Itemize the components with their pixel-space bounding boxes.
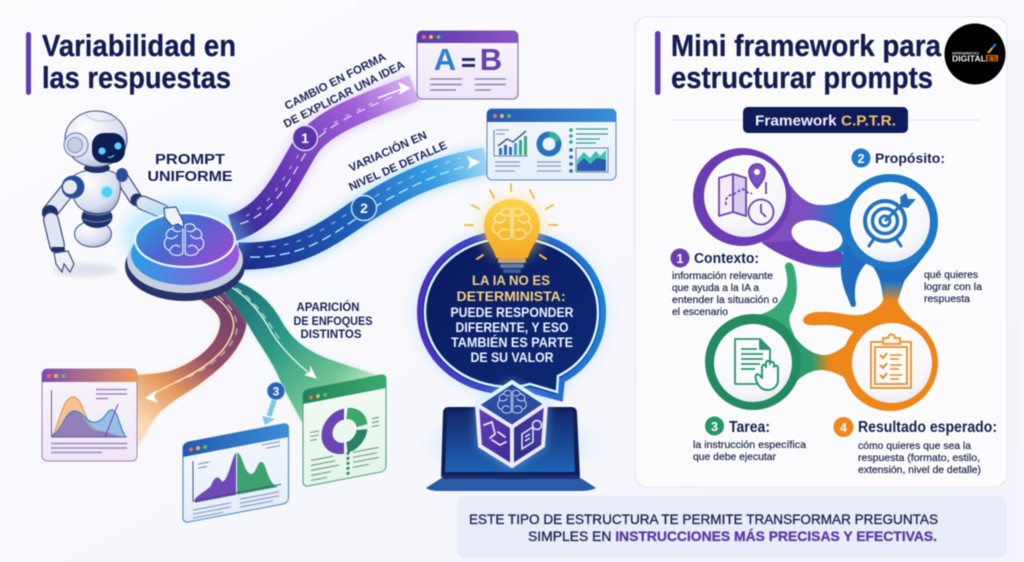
item: proposito xyxy=(852,148,982,305)
ribbon: purple path to A=B card xyxy=(232,82,414,228)
banner: closing message xyxy=(457,496,1007,558)
item: contexto: entender la situación o xyxy=(672,294,778,306)
donut chart xyxy=(540,134,558,154)
arrow: green xyxy=(304,365,317,379)
item: contexto: el escenario xyxy=(672,306,728,318)
badge 3 with arrow xyxy=(262,382,285,425)
robot torso xyxy=(71,169,120,214)
framework pill xyxy=(671,107,980,133)
label: prompt uniforme xyxy=(148,151,232,185)
item: tarea: que debe ejecutar xyxy=(693,451,776,463)
item: resultado esperado: Resultado esperado: xyxy=(858,419,997,436)
area chart xyxy=(576,148,608,172)
heading: mini framework: Mini framework para xyxy=(671,28,942,63)
connector: blue to orange xyxy=(882,282,904,303)
laptop xyxy=(426,407,596,491)
label: aparicion de enfoques distintos: DISTINTOS xyxy=(300,329,362,341)
icon: map, pin and clock xyxy=(719,164,774,224)
card: green tilted donut xyxy=(303,374,386,487)
ribbon: orange path to chart card xyxy=(137,292,247,447)
area chart: curves xyxy=(52,390,126,437)
logo: herramientas digitales: ES xyxy=(987,56,997,63)
node: contexto xyxy=(693,148,791,246)
badge 2: 2 xyxy=(360,200,368,216)
item: tarea xyxy=(693,416,806,463)
label: cambio en forma: CAMBIO EN FORMA xyxy=(283,51,388,113)
ribbon: green path to chart cards xyxy=(220,280,378,424)
icon: document with hand xyxy=(735,339,778,390)
node: proposito xyxy=(842,174,938,270)
icon: clipboard checklist xyxy=(871,334,911,388)
card: A = B: B xyxy=(480,42,502,77)
item: proposito: 2 xyxy=(858,152,865,166)
connector: green to orange xyxy=(782,322,862,396)
item: tarea: 3 xyxy=(711,420,718,434)
heading: variabilidad: Variabilidad en xyxy=(42,28,236,63)
callout: la IA no es determinista: TAMBIÉN ES PARTE xyxy=(451,335,573,350)
panel: framework background xyxy=(635,17,1007,487)
item: resultado esperado: extensión, nivel de detalle) xyxy=(858,464,981,476)
icon: lightbulb with brain xyxy=(465,184,557,273)
logo: herramientas digitales xyxy=(944,24,1006,84)
robot right arm xyxy=(122,178,162,211)
robot xyxy=(42,111,162,277)
heading: mini framework xyxy=(655,28,942,95)
heading: variabilidad xyxy=(26,28,236,95)
label: prompt uniforme: PROMPT xyxy=(155,151,225,168)
label: variacion en nivel de detalle: VARIACIÓN EN xyxy=(347,129,429,175)
label: prompt uniforme: UNIFORME xyxy=(148,168,232,185)
label: aparicion de enfoques distintos: APARICIÓN xyxy=(296,301,360,314)
robot left arm xyxy=(42,192,74,272)
label: aparicion de enfoques distintos: DE ENFOQUES xyxy=(294,316,373,328)
item: resultado esperado: cómo quieres que sea la xyxy=(858,440,971,452)
robot head xyxy=(64,111,127,167)
area chart: purple and green xyxy=(193,444,281,503)
connector: green tail xyxy=(745,262,797,342)
connector: purple to blue with tail xyxy=(762,156,872,275)
badge 1: 1 xyxy=(301,130,309,146)
label: cambio en forma: DE EXPLICAR UNA IDEA xyxy=(282,59,407,131)
label: aparicion de enfoques distintos xyxy=(294,301,373,341)
item: contexto xyxy=(670,248,778,318)
callout: la IA no es determinista: LA IA NO ES xyxy=(472,273,550,288)
card: A = B: A xyxy=(434,42,456,77)
callout: la IA no es determinista: DIFERENTE, Y ESO xyxy=(456,320,568,335)
icon: dice xyxy=(475,380,548,468)
badge 2 xyxy=(352,196,376,220)
icon: brain on button xyxy=(163,222,205,257)
item: proposito: qué quieres xyxy=(924,269,978,281)
donut chart: purple and green xyxy=(327,411,362,451)
card: orange chart xyxy=(42,369,137,461)
card: blue tilted chart xyxy=(183,423,288,523)
banner: closing message: ESTE TIPO DE ESTRUCTURA TE PERMITE TRANSFORMAR PREGUNTAS xyxy=(469,512,938,527)
banner: closing message: SIMPLES EN INSTRUCCIONES MÁS PRECISAS Y EFECTIVAS. xyxy=(528,529,937,544)
item: resultado esperado: 4 xyxy=(840,421,847,435)
framework pill: Framework C.P.T.R. xyxy=(755,114,896,130)
arrow: blue xyxy=(467,156,480,169)
badge 1 xyxy=(292,126,318,150)
item: proposito: lograr con la xyxy=(924,281,982,293)
connector: orange tail xyxy=(803,299,928,345)
prompt button with brain xyxy=(123,200,247,301)
diagram: connected framework rings xyxy=(693,148,938,411)
item: contexto: información relevante xyxy=(672,270,773,282)
item: contexto: que ayuda a la IA a xyxy=(672,282,759,294)
badge 3 with arrow: 3 xyxy=(273,384,280,398)
node: resultado esperado xyxy=(842,315,938,411)
item: tarea: la instrucción específica xyxy=(693,439,806,451)
robot hand over button xyxy=(164,207,184,228)
item: resultado esperado: respuesta (formato, estilo, xyxy=(858,452,980,464)
callout: la IA no es determinista: DETERMINISTA: xyxy=(456,289,566,304)
logo: herramientas digitales: DIGITAL xyxy=(952,54,986,64)
callout: la IA no es determinista: PUEDE RESPONDER xyxy=(450,305,574,320)
node: tarea xyxy=(705,314,801,410)
arrow: orange xyxy=(145,390,158,403)
heading: mini framework: estructurar prompts xyxy=(671,60,933,95)
connector: blue tail xyxy=(841,245,925,307)
callout: la IA no es determinista xyxy=(450,273,574,365)
ribbon: blue path to dashboard card xyxy=(238,156,486,257)
item: tarea: Tarea: xyxy=(729,419,770,436)
card: A = B xyxy=(417,31,518,99)
robot lower body xyxy=(74,221,112,247)
item: contexto: 1 xyxy=(677,252,684,266)
label: variacion en nivel de detalle: NIVEL DE DETALLE xyxy=(347,140,449,194)
icon: target xyxy=(865,193,916,246)
heading: variabilidad: las respuestas xyxy=(42,60,231,95)
item: contexto: Contexto: xyxy=(694,251,759,267)
arrow: purple xyxy=(398,82,411,95)
callout: la IA no es determinista: DE SU VALOR xyxy=(470,350,554,365)
speech bubble xyxy=(420,233,603,398)
logo: herramientas digitales: HERRAMIENTAS xyxy=(952,52,979,56)
item: proposito: respuesta xyxy=(924,293,970,305)
item: resultado esperado xyxy=(834,417,997,476)
card: dashboard xyxy=(487,109,616,180)
bar chart xyxy=(494,130,528,156)
item: proposito: Propósito: xyxy=(875,150,945,166)
robot neck xyxy=(84,163,110,173)
robot chest light xyxy=(101,186,113,198)
